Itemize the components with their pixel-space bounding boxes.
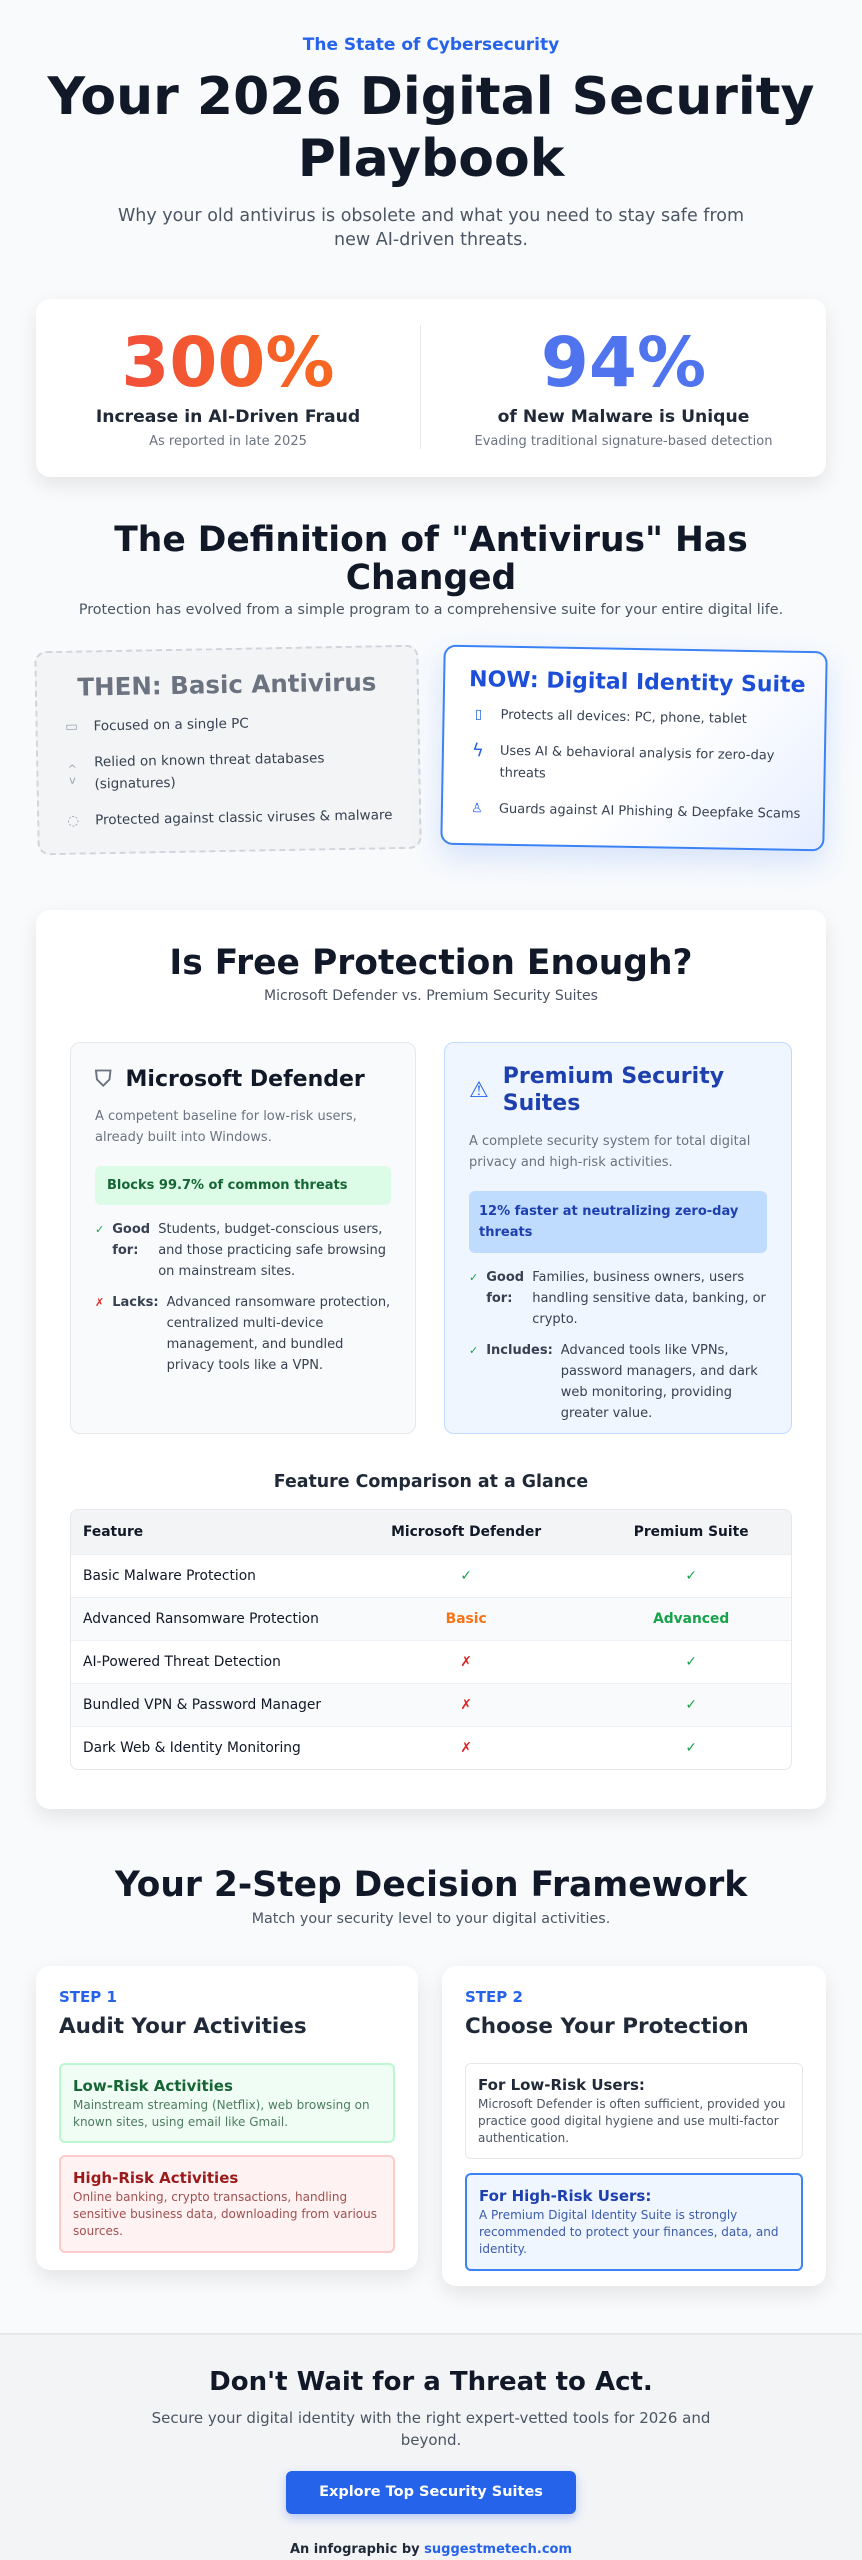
stat: 94%: of New Malware is Unique: [498, 407, 749, 427]
subtitle: Match your security level to your digital activities.: [252, 1911, 610, 1927]
card: defender: [70, 1042, 416, 1434]
section heading: framework: Your 2-Step Decision Framework: [115, 1865, 747, 1905]
heading: ⛉: [95, 1067, 112, 1092]
item: Protects all devices: PC, phone, tablet: [500, 708, 747, 727]
label: STEP 1: [59, 1988, 117, 2006]
button: Explore Top Security Suites: [319, 2484, 543, 2500]
table heading: Feature Comparison at a Glance: [274, 1472, 588, 1492]
comparison table: Microsoft Defender: [391, 1524, 541, 1540]
credit: An infographic by suggestmetech.com: [290, 2542, 572, 2557]
item: Protected against classic viruses & malware: [95, 807, 393, 828]
comparison table: ✗: [460, 1740, 472, 1756]
stat: 300%: [96, 323, 360, 449]
high risk box: Online banking, crypto transactions, handling sensitive business data, downloading from various sources.: [73, 2190, 377, 2238]
CTA text: Secure your digital identity with the right expert-vetted tools for 2026 and beyond.: [152, 2409, 710, 2449]
stat: 94%: [475, 323, 772, 449]
low risk user box: [465, 2063, 803, 2159]
stat box: [469, 1191, 767, 1253]
panel: free protection: [36, 910, 826, 1809]
item: ◌: [67, 813, 79, 829]
section subtitle: Protection has evolved from a simple program to a comprehensive suite for your entire digital life.: [79, 602, 783, 618]
kicker: The State of Cybersecurity: [303, 35, 559, 55]
panel: THEN: [34, 645, 422, 855]
lacks: Advanced ransomware protection, centralized multi-device management, and bundled privacy tools like a VPN.: [167, 1295, 390, 1373]
stat box: Blocks 99.7% of common threats: [107, 1178, 348, 1193]
good for: ✓: [95, 1223, 104, 1236]
good for: Students, budget-conscious users, and those practicing safe browsing on mainstream sites.: [158, 1222, 386, 1279]
good for: Families, business owners, users handling sensitive data, banking, or crypto.: [532, 1270, 766, 1327]
heading: Microsoft Defender: [126, 1067, 365, 1092]
item: Relied on known threat databases (signatures): [94, 750, 325, 792]
low risk box: Low-Risk Activities: [73, 2077, 233, 2095]
good for: ✓: [469, 1271, 478, 1284]
heading: Audit Your Activities: [59, 2014, 307, 2039]
comparison table: Premium Suite: [634, 1524, 749, 1540]
high risk box: [59, 2155, 395, 2253]
item: Uses AI & behavioral analysis for zero-day threats: [499, 744, 775, 781]
high risk box: High-Risk Activities: [73, 2169, 238, 2187]
low risk user box: Microsoft Defender is often sufficient, provided you practice good digital hygiene and use multi-factor authentication.: [478, 2097, 786, 2145]
comparison table: ✓: [685, 1696, 697, 1712]
comparison table: ✗: [460, 1696, 472, 1712]
desc: A competent baseline for low-risk users, already built into Windows.: [95, 1109, 357, 1145]
comparison table: [70, 1509, 792, 1770]
comparison table: ✓: [685, 1568, 697, 1584]
heading: Choose Your Protection: [465, 2014, 749, 2039]
item: Focused on a single PC: [93, 716, 249, 734]
comparison table: Advanced Ransomware Protection: [83, 1610, 319, 1626]
stat: 94%: 94%: [541, 323, 706, 403]
button: [286, 2471, 576, 2514]
stats card: [36, 299, 826, 477]
heading: Is Free Protection Enough?: [169, 943, 693, 983]
stat box: 12% faster at neutralizing zero-day threats: [479, 1204, 738, 1240]
includes: Includes:: [486, 1343, 553, 1358]
section heading: definition: The Definition of "Antivirus" Has Changed: [114, 520, 748, 598]
high risk user box: [465, 2173, 803, 2271]
item: v: [69, 774, 76, 787]
card: premium: [444, 1042, 792, 1434]
high risk user box: A Premium Digital Identity Suite is strongly recommended to protect your finances, data, and identity.: [479, 2208, 779, 2256]
comparison table: Basic Malware Protection: [83, 1568, 256, 1584]
low risk user box: For Low-Risk Users:: [478, 2076, 645, 2094]
high risk user box: For High-Risk Users:: [479, 2187, 651, 2205]
item: ^: [68, 763, 77, 776]
panel: NOW: [440, 645, 828, 851]
comparison table: Advanced: [653, 1610, 729, 1626]
heading: NOW: Digital Identity Suite: [469, 667, 806, 698]
stat: 300%: 300%: [121, 323, 335, 403]
includes: [469, 1343, 758, 1421]
heading: Premium Security Suites: [503, 1064, 724, 1116]
item: ▯: [475, 707, 482, 722]
subtitle: Microsoft Defender vs. Premium Security Suites: [264, 988, 598, 1004]
footer CTA band: [0, 2333, 862, 2560]
comparison table: ✓: [460, 1568, 472, 1584]
stat: 300%: As reported in late 2025: [149, 434, 307, 449]
comparison table: Feature: [83, 1524, 143, 1540]
step 1 card: [36, 1966, 418, 2270]
title: Your 2026 Digital Security Playbook: [48, 67, 814, 189]
label: STEP 2: [465, 1988, 523, 2006]
includes: ✓: [469, 1344, 478, 1357]
low risk box: Mainstream streaming (Netflix), web browsing on known sites, using email like Gmail.: [73, 2098, 370, 2129]
comparison table: ✓: [685, 1740, 697, 1756]
comparison table: ✓: [685, 1654, 697, 1670]
comparison table: AI-Powered Threat Detection: [83, 1654, 281, 1670]
item: Guards against AI Phishing & Deepfake Scams: [499, 802, 800, 822]
subtitle: Why your old antivirus is obsolete and what you need to stay safe from new AI-driven threats.: [118, 206, 744, 250]
comparison table: Basic: [446, 1610, 487, 1626]
comparison table: Dark Web & Identity Monitoring: [83, 1740, 301, 1756]
item: ▭: [65, 719, 78, 735]
desc: A complete security system for total digital privacy and high-risk activities.: [469, 1134, 750, 1170]
low risk box: [59, 2063, 395, 2143]
heading: THEN: Basic Antivirus: [77, 667, 377, 702]
heading: ⚠︎: [469, 1078, 489, 1102]
lacks: Lacks:: [112, 1295, 159, 1310]
comparison table: ✗: [460, 1654, 472, 1670]
stat: 94%: Evading traditional signature-based detection: [475, 434, 772, 449]
item: ♙: [471, 801, 483, 816]
item: ϟ: [472, 740, 484, 761]
includes: Advanced tools like VPNs, password managers, and dark web monitoring, providing greater value.: [561, 1343, 758, 1421]
comparison table: Bundled VPN & Password Manager: [83, 1696, 321, 1712]
CTA heading: Don't Wait for a Threat to Act.: [209, 2367, 653, 2397]
lacks: ✗: [95, 1296, 104, 1309]
stat: 300%: Increase in AI-Driven Fraud: [96, 407, 360, 427]
good for: Good for:: [486, 1270, 524, 1306]
good for: Good for:: [112, 1222, 150, 1258]
stat box: [95, 1166, 391, 1205]
step 2 card: [442, 1966, 826, 2286]
